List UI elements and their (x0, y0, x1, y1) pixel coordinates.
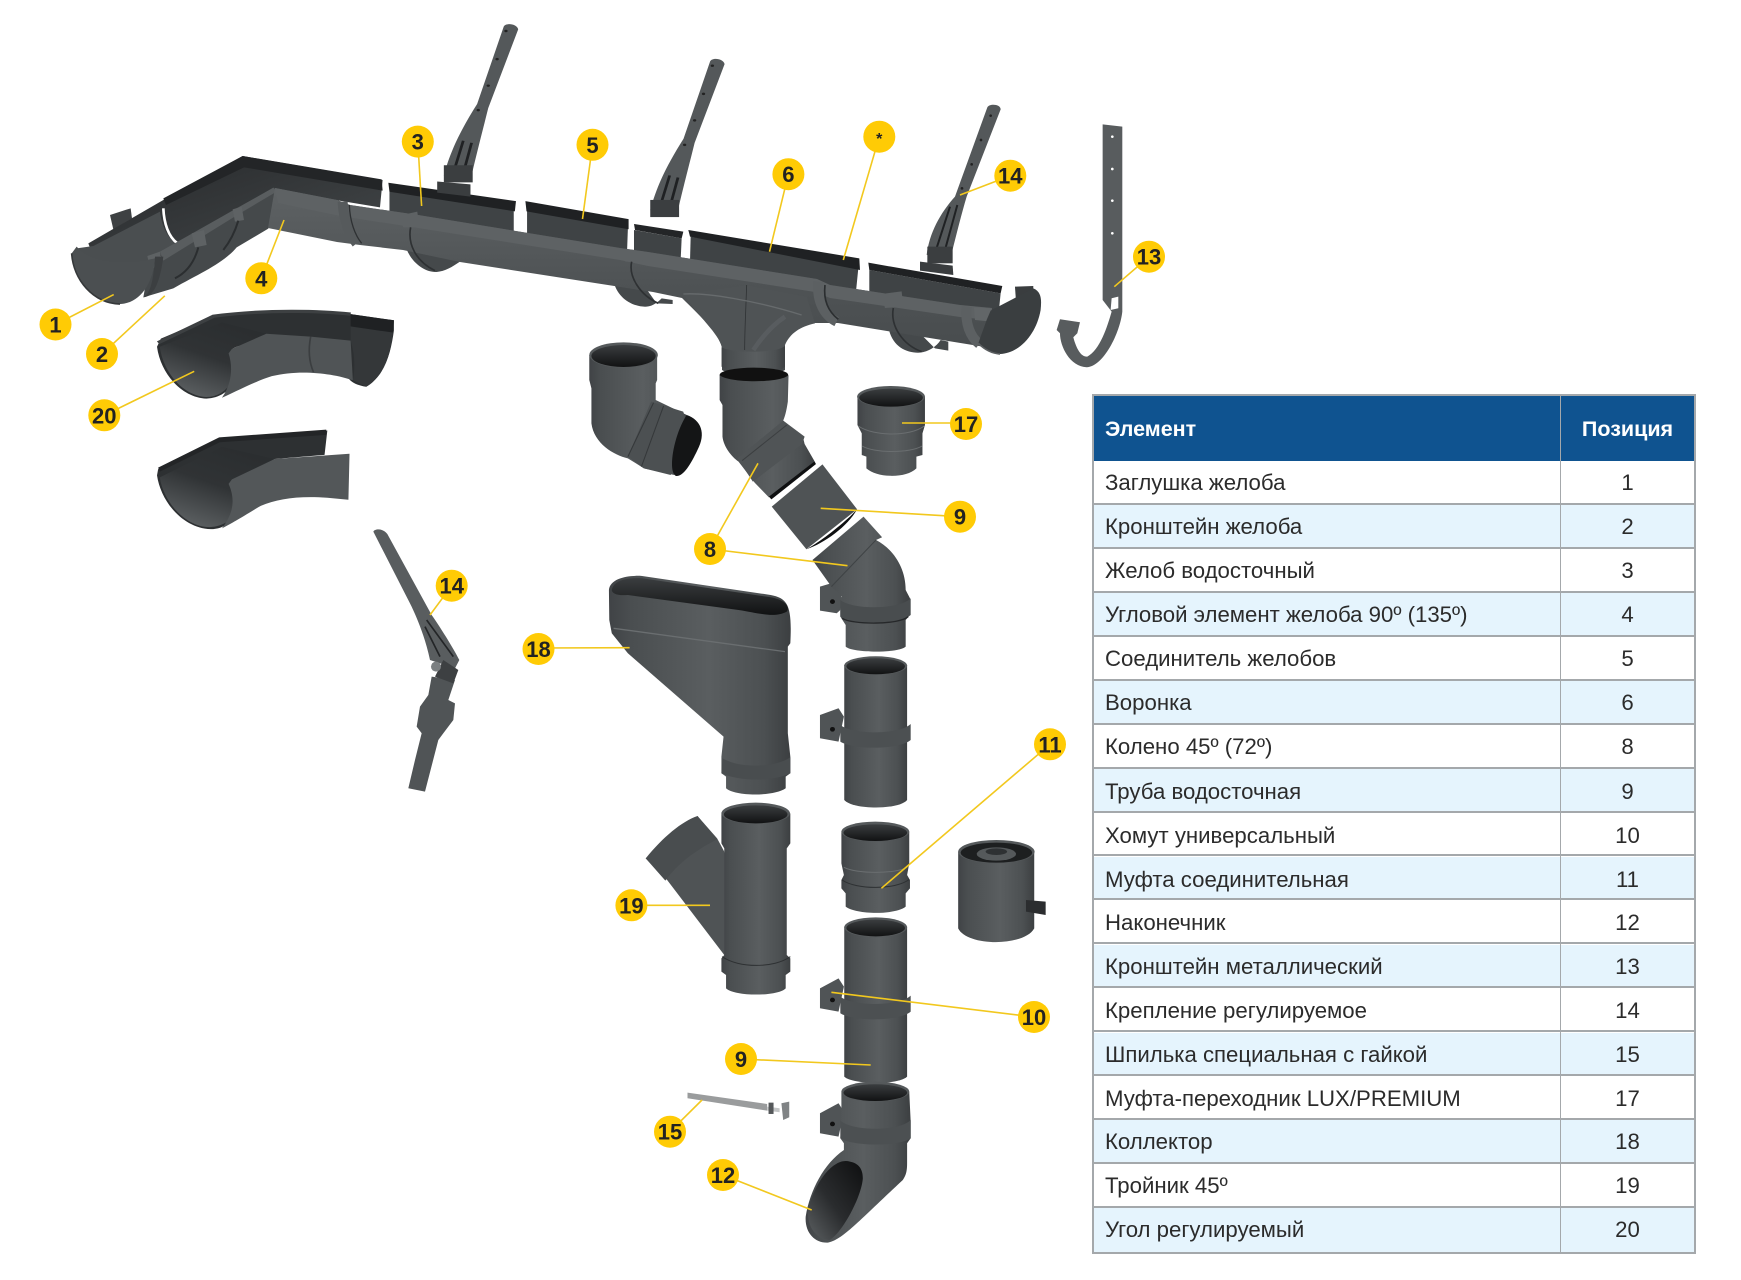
badge 18: 18 (526, 637, 551, 662)
parts table: 19 (1615, 1173, 1640, 1198)
roof strap 2 (650, 59, 725, 217)
badge 1 (40, 308, 72, 340)
badge 11: 11 (1038, 732, 1062, 757)
gutter top bead (275, 188, 992, 320)
roof strap 1 (437, 24, 518, 197)
parts table: Наконечник (1105, 910, 1225, 934)
badge 5: 5 (586, 133, 599, 158)
badge asterisk: * (876, 131, 883, 148)
parts table: Тройник 45º (1105, 1173, 1228, 1198)
callout leader lines (56, 137, 1149, 1210)
badge 12 (707, 1159, 739, 1191)
gutter run with funnel outlet (72, 188, 1041, 376)
badge 15 (654, 1116, 686, 1148)
special stud with nut (687, 1093, 789, 1120)
parts table: Колено 45º (72º) (1105, 734, 1272, 759)
drip outlet piece (958, 840, 1046, 942)
badge 19 (615, 889, 647, 921)
tee 45 degrees (646, 803, 790, 995)
badge 2: 2 (96, 342, 108, 367)
parts table: Соединитель желобов (1105, 646, 1336, 671)
parts table: Угол регулируемый (1105, 1217, 1304, 1242)
elbow side piece (589, 342, 702, 476)
badge 20 (88, 399, 120, 431)
parts table: Хомут универсальный (1105, 822, 1335, 848)
badge 14 lower: 14 (439, 574, 465, 599)
parts table: Кронштейн металлический (1105, 954, 1383, 978)
parts table: 2 (1621, 514, 1634, 539)
parts table: 8 (1621, 734, 1634, 759)
parts table: 20 (1615, 1217, 1640, 1242)
parts table: 3 (1621, 558, 1634, 583)
roof strap 3 (920, 105, 1001, 275)
table header: Позиция (1582, 417, 1673, 441)
downpipe middle with clamp (820, 656, 911, 807)
parts table: 9 (1621, 779, 1634, 804)
stop end left (72, 247, 163, 304)
parts table: 4 (1621, 602, 1634, 627)
badge 3 (402, 126, 434, 158)
parts table: Коллектор (1105, 1129, 1213, 1154)
coupling 11 (841, 822, 910, 913)
parts table: 11 (1616, 866, 1639, 892)
badge 14 top: 14 (998, 164, 1023, 189)
collector (609, 576, 791, 795)
badge 9 upper: 9 (954, 505, 966, 530)
parts table: Шпилька специальная с гайкой (1105, 1042, 1427, 1066)
badge 2 (86, 338, 118, 370)
corner element lower (157, 430, 350, 529)
badge 14 top (994, 160, 1026, 192)
parts table: Муфта соединительная (1105, 866, 1349, 892)
badge 9 upper (944, 501, 976, 533)
badge 4 (245, 262, 277, 294)
lower downpipe with clamp (820, 917, 911, 1083)
badge 9 lower: 9 (735, 1047, 747, 1072)
parts table: 17 (1615, 1086, 1640, 1110)
parts table: 6 (1621, 690, 1634, 715)
parts table: 5 (1621, 646, 1634, 671)
parts table: 1 (1621, 470, 1634, 495)
parts table: Муфта-переходник LUX/PREMIUM (1105, 1086, 1461, 1110)
parts table (1092, 394, 1696, 1254)
parts table: Крепление регулируемое (1105, 998, 1367, 1022)
main gutter body (268, 188, 992, 376)
badge 17: 17 (954, 412, 978, 437)
parts table: 14 (1615, 998, 1640, 1022)
metal bracket 13 (1057, 124, 1122, 367)
parts table: 18 (1615, 1129, 1640, 1154)
diagonal pipe (772, 464, 857, 549)
parts table: 10 (1615, 822, 1640, 848)
parts table: 15 (1615, 1042, 1640, 1066)
numbered callout badges (40, 121, 1165, 1191)
badge 17 (950, 408, 982, 440)
parts table: Угловой элемент желоба 90º (135º) (1105, 602, 1468, 627)
badge 6: 6 (782, 162, 795, 187)
detached roof strap (373, 529, 459, 792)
parts table: 12 (1615, 910, 1640, 934)
badge 20: 20 (92, 403, 117, 428)
badge 1: 1 (49, 312, 62, 338)
parts table: Воронка (1105, 690, 1192, 715)
adjustable angle 20 (157, 311, 394, 399)
badge 13: 13 (1137, 245, 1161, 270)
badge 11 (1034, 728, 1066, 760)
gutter back plates right (634, 224, 1033, 317)
badge 5 (576, 129, 608, 161)
parts table: Кронштейн желоба (1105, 514, 1302, 539)
badge 15: 15 (658, 1120, 682, 1145)
lower elbow with clamp (812, 517, 911, 652)
outlet 12 with clamp (806, 1082, 911, 1243)
stop end right (978, 288, 1041, 354)
parts table: 13 (1615, 954, 1640, 978)
gutter back plates (388, 183, 629, 255)
parts table: Труба водосточная (1105, 779, 1301, 804)
table header (1094, 396, 1694, 461)
badge 12: 12 (711, 1163, 735, 1188)
gutter assembly (40, 24, 1165, 1243)
corner gutter element (77, 156, 383, 297)
badge 3: 3 (412, 130, 424, 155)
main upper elbow (720, 368, 816, 499)
funnel (683, 285, 815, 374)
badge 10: 10 (1022, 1005, 1046, 1030)
badge 9 lower (725, 1043, 757, 1075)
badge 18 (522, 633, 554, 665)
badge 19: 19 (619, 893, 644, 918)
gutter couplers and bracket straps (343, 202, 992, 352)
badge 8 (694, 533, 726, 565)
hanging brackets under gutter (405, 243, 948, 353)
parts table: Заглушка желоба (1105, 470, 1285, 495)
badge 10 (1018, 1001, 1050, 1033)
table header: Элемент (1105, 417, 1196, 441)
parts table: Желоб водосточный (1105, 558, 1315, 583)
badge 8: 8 (704, 537, 716, 562)
badge 4: 4 (255, 266, 268, 291)
badge 14 lower (436, 570, 468, 602)
badge 6 (772, 158, 804, 190)
badge 13 (1133, 241, 1165, 273)
adapter 17 (857, 386, 925, 476)
badge asterisk (863, 121, 895, 153)
